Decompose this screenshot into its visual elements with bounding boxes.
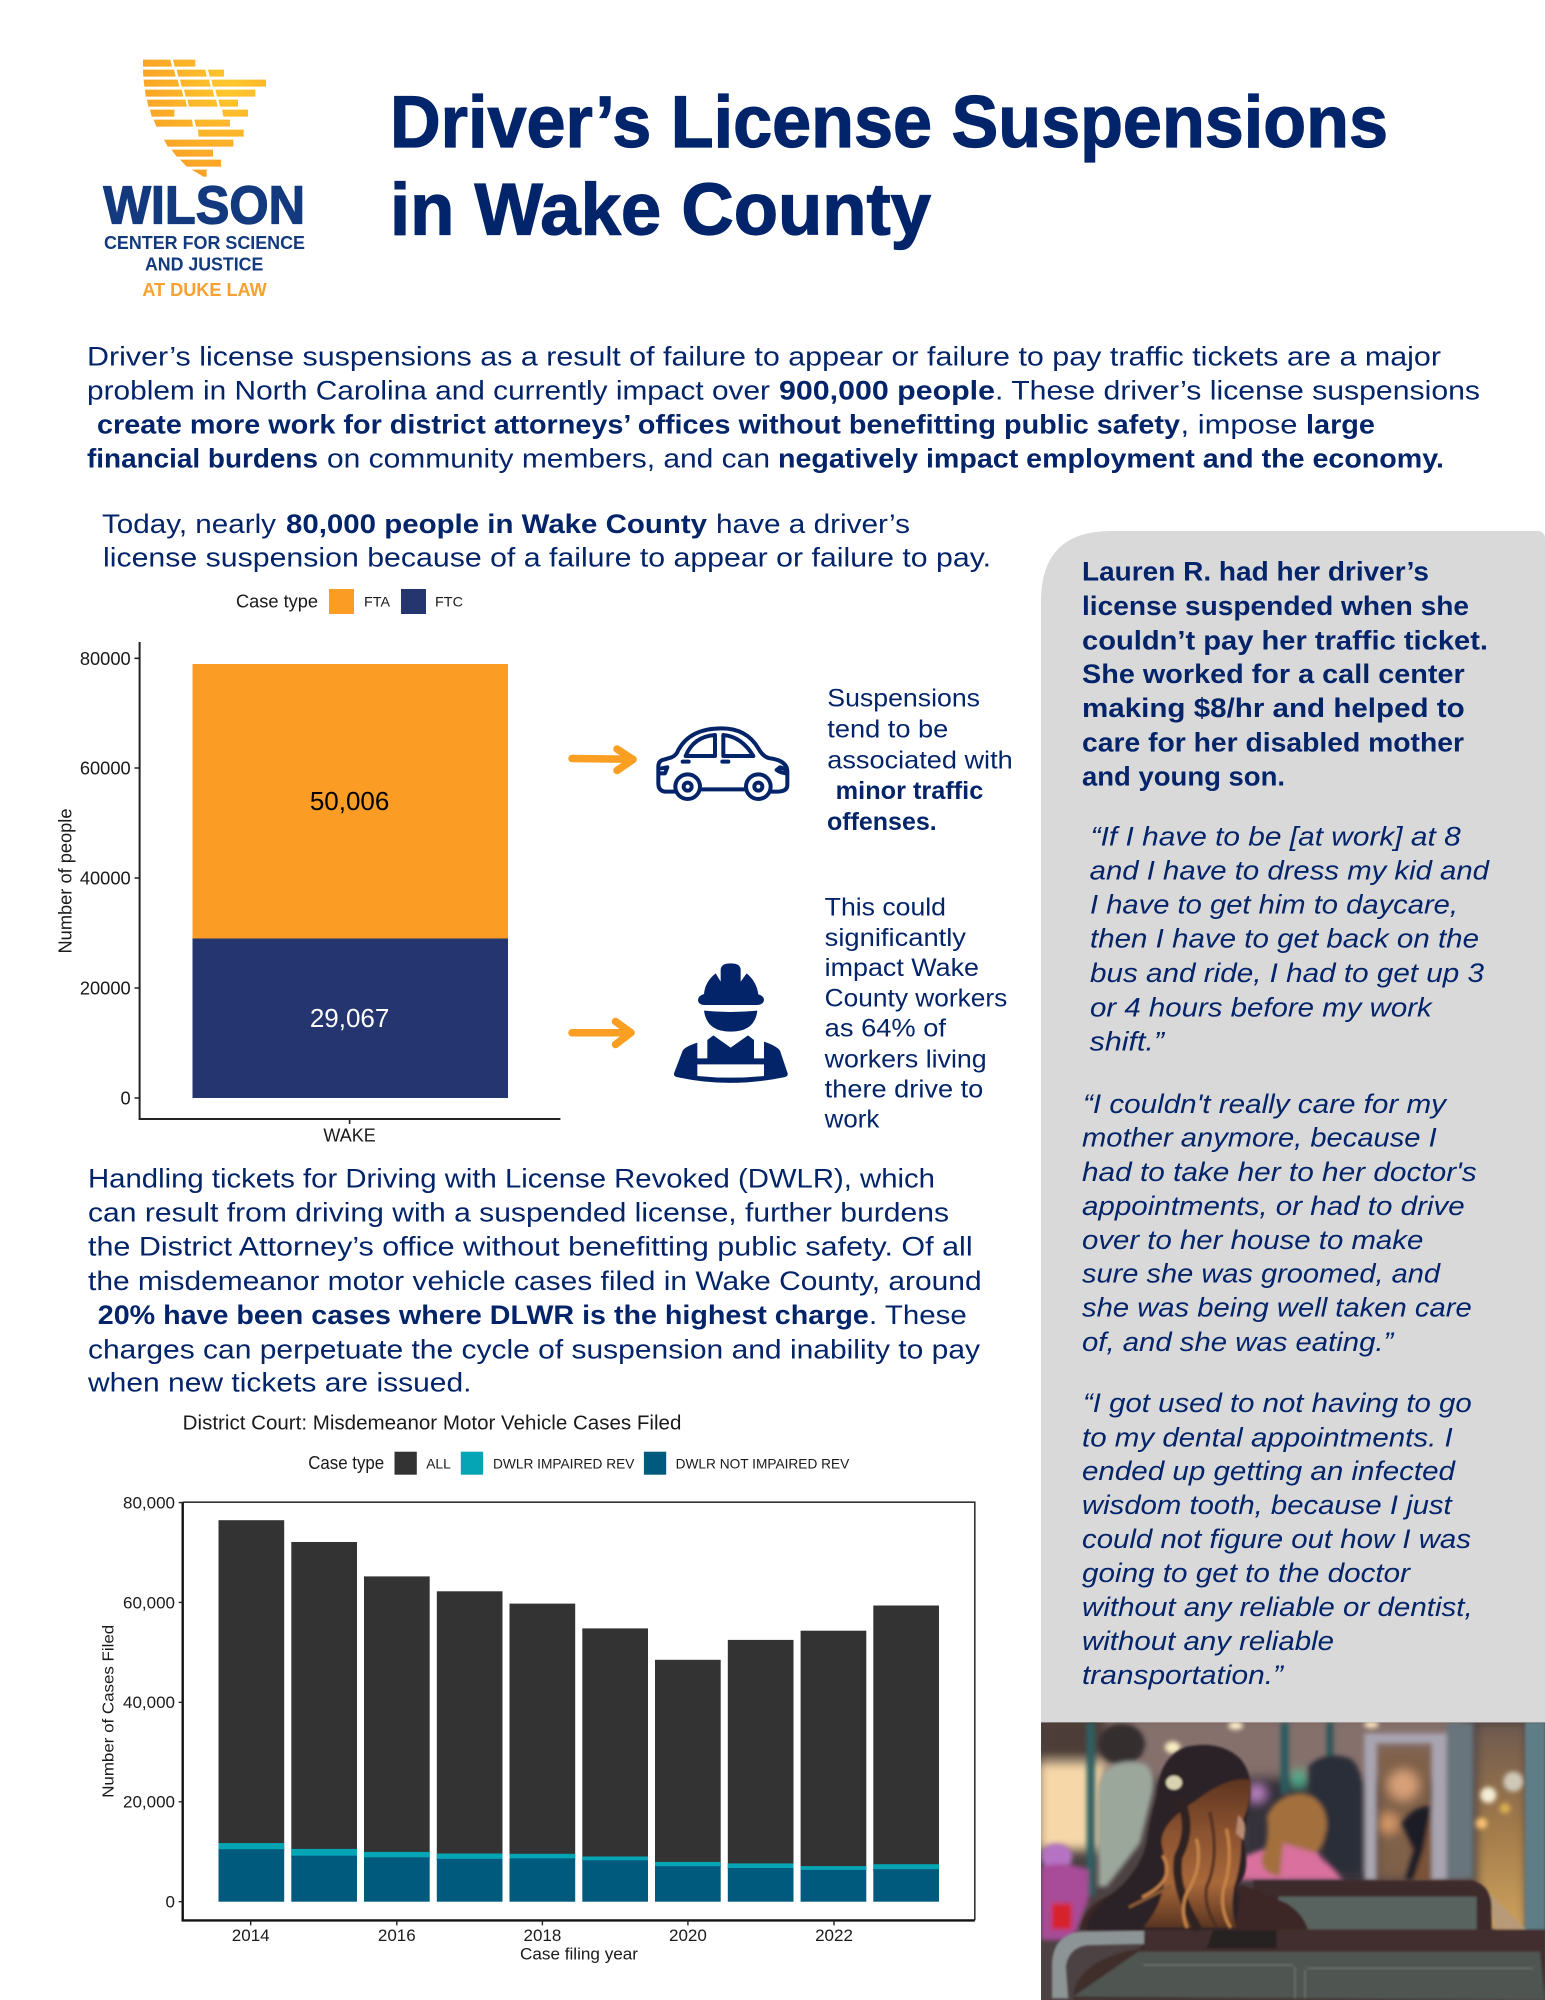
quote 1: bus and ride, I had to get up 3 — [1090, 958, 1484, 988]
bars: DWLR impaired revocation — [218, 1843, 939, 1870]
story heading: couldn’t pay her traffic ticket. — [1082, 625, 1488, 655]
quote 3: going to get to the doctor — [1082, 1558, 1411, 1588]
quote 3: without any reliable — [1082, 1626, 1334, 1656]
title — [390, 82, 1388, 251]
bars: DWLR not impaired revocation — [218, 1849, 939, 1902]
text: impact on Wake County workers: impact Wake — [825, 954, 979, 982]
DWLR paragraph: can result from driving with a suspended license, further burdens — [88, 1198, 949, 1228]
chart legend: ALL — [426, 1455, 451, 1471]
story heading: and young son. — [1082, 762, 1285, 792]
DWLR paragraph — [87, 1164, 982, 1398]
intro paragraph: problem in North Carolina and currently impact over — [87, 375, 770, 405]
text: impact on Wake County workers: work — [824, 1105, 880, 1133]
intro paragraph: Driver’s license suspensions as a result of failure to appear or failure to pay traffic tickets are a major — [87, 342, 1441, 372]
woman hair — [1087, 1745, 1251, 1929]
logo wordmark: AT DUKE LAW — [142, 279, 267, 300]
chart legend: Case type — [308, 1453, 384, 1473]
quote 2: over to her house to make — [1082, 1225, 1423, 1255]
quote 1: “If I have to be [at work] at 8 — [1091, 822, 1461, 852]
quote 1: or 4 hours before my work — [1090, 992, 1433, 1022]
quote 2: “I couldn't really care for my — [1083, 1089, 1448, 1119]
quote 3: without any reliable or dentist, — [1082, 1592, 1473, 1622]
chart legend: DWLR IMPAIRED REV — [493, 1455, 635, 1471]
title: in Wake County — [390, 170, 931, 251]
chart axes: 20000 — [80, 978, 131, 998]
quote 2: mother anymore, because I — [1082, 1123, 1437, 1153]
bar: FTC — [192, 938, 508, 1098]
intro paragraph — [87, 342, 1480, 473]
chart title: District Court: Misdemeanor Motor Vehicle Cases Filed — [183, 1412, 681, 1434]
chart axes — [100, 1494, 975, 1963]
chart legend: FTA — [364, 594, 391, 610]
DWLR paragraph: when new tickets are issued. — [87, 1368, 472, 1398]
chart axes: 2022 — [815, 1926, 853, 1945]
text: minor traffic offenses: Suspensions — [827, 685, 980, 713]
text: impact on Wake County workers: there drive to — [825, 1075, 983, 1103]
bar: FTC: 29,067 — [310, 1003, 389, 1033]
icon: construction worker — [674, 963, 788, 1083]
chart axes: 40,000 — [123, 1693, 175, 1712]
intro paragraph: , impose — [1180, 409, 1298, 439]
quote 3: could not figure out how I was — [1082, 1524, 1471, 1554]
icon: car — [658, 728, 787, 799]
text: minor traffic offenses: offenses. — [827, 808, 937, 836]
text: minor traffic offenses: associated with — [827, 746, 1013, 774]
logo: Wilson Center for Science and Justice — [103, 60, 305, 300]
DWLR paragraph: the misdemeanor motor vehicle cases filed in Wake County, around — [88, 1266, 982, 1296]
chart axes: 60,000 — [123, 1593, 175, 1612]
chart axes: 0 — [121, 1088, 131, 1108]
chart axes: 2018 — [523, 1926, 561, 1945]
chart legend: FTC — [435, 594, 463, 610]
chart axes: Number of people — [56, 808, 76, 954]
story heading: license suspended when she — [1082, 591, 1469, 621]
chart axes: 2016 — [378, 1926, 416, 1945]
quote 3: to my dental appointments. I — [1082, 1422, 1453, 1452]
stacked bar chart: suspensions by case type — [56, 589, 560, 1145]
logo wordmark: WILSON — [103, 175, 305, 235]
chart axes: Case filing year — [520, 1944, 638, 1963]
chart axes: Number of Cases Filed — [100, 1625, 118, 1798]
chart axes: WAKE — [323, 1125, 376, 1145]
DWLR paragraph: the District Attorney’s office without benefitting public safety. Of all — [88, 1232, 973, 1262]
intro paragraph: 900,000 people — [779, 375, 995, 405]
DWLR paragraph: charges can perpetuate the cycle of suspension and inability to pay — [88, 1334, 981, 1364]
title: Driver’s License Suspensions — [390, 82, 1388, 163]
text: impact on Wake County workers: as 64% of — [825, 1015, 946, 1043]
chart axes: 40000 — [80, 868, 131, 888]
bar: FTA: 50,006 — [310, 786, 389, 816]
Wake County statement: have a driver’s — [716, 509, 910, 539]
DWLR paragraph: 20% have been cases where DLWR is the highest charge — [98, 1300, 869, 1330]
quote 3: wisdom tooth, because I just — [1082, 1490, 1453, 1520]
quote 2: had to take her to her doctor's — [1082, 1157, 1477, 1187]
text: impact on Wake County workers: This could — [825, 893, 946, 921]
chart legend: DWLR NOT IMPAIRED REV — [676, 1455, 850, 1471]
chart axes: 0 — [166, 1893, 175, 1912]
text: impact on Wake County workers — [824, 893, 1007, 1133]
DWLR paragraph: . These — [869, 1300, 967, 1330]
Wake County statement: 80,000 people in Wake County — [286, 509, 707, 539]
intro paragraph: negatively impact employment and the economy. — [778, 443, 1444, 473]
story heading: Lauren R. had her driver’s — [1082, 557, 1429, 587]
intro paragraph: large — [1306, 409, 1375, 439]
arrow: to car — [572, 749, 633, 770]
DWLR paragraph: Handling tickets for Driving with License Revoked (DWLR), which — [88, 1164, 935, 1194]
quote 3: transportation.” — [1082, 1660, 1284, 1690]
Wake County statement — [102, 509, 991, 573]
Wake County statement: license suspension because of a failure to appear or failure to pay. — [103, 543, 991, 573]
bar chart: misdemeanor motor vehicle cases filed — [100, 1412, 975, 1963]
Wake County statement: Today, nearly — [102, 509, 277, 539]
quote 3: “I got used to not having to go — [1083, 1388, 1472, 1418]
logo wordmark — [103, 175, 305, 300]
quote 1: then I have to get back on the — [1090, 924, 1479, 954]
seat backs — [1052, 1722, 1545, 2000]
chart legend — [308, 1452, 850, 1475]
quote 2: of, and she was eating.” — [1082, 1327, 1394, 1357]
chart legend — [236, 589, 463, 614]
story heading: care for her disabled mother — [1082, 727, 1465, 757]
bar: FTA — [192, 664, 508, 938]
logo wordmark: AND JUSTICE — [145, 254, 263, 275]
chart axes — [56, 642, 560, 1145]
chart axes: 2014 — [232, 1926, 270, 1945]
intro paragraph: financial burdens — [87, 443, 318, 473]
chart axes: 80000 — [80, 648, 131, 669]
text: minor traffic offenses — [827, 685, 1013, 836]
quote 3: ended up getting an infected — [1082, 1456, 1456, 1486]
quote 1 — [1090, 822, 1490, 1056]
story heading: making $8/hr and helped to — [1082, 693, 1465, 723]
text: minor traffic offenses: tend to be — [827, 716, 948, 744]
chart axes: 20,000 — [123, 1793, 175, 1812]
story heading: She worked for a call center — [1082, 659, 1465, 689]
chart axes: 60000 — [80, 758, 131, 778]
text: impact on Wake County workers: County workers — [825, 985, 1007, 1013]
intro paragraph: on community members, and can — [327, 443, 770, 473]
panel: Lauren R. story — [1041, 531, 1545, 1725]
quote 3 — [1082, 1388, 1473, 1690]
arrow: to worker — [572, 1022, 631, 1044]
text: impact on Wake County workers: workers living — [824, 1045, 987, 1073]
logo mark: striped shield — [143, 60, 266, 177]
intro paragraph: create more work for district attorneys’ offices without benefitting public safety — [97, 409, 1180, 439]
text: impact on Wake County workers: significantly — [825, 924, 967, 952]
quote 2: she was being well taken care — [1082, 1292, 1472, 1322]
chart axes: 2020 — [669, 1926, 707, 1945]
intro paragraph: . These driver’s license suspensions — [995, 375, 1480, 405]
photo: woman riding a bus — [1038, 1717, 1545, 2000]
chart legend: Case type — [236, 592, 318, 612]
quote 2: sure she was groomed, and — [1082, 1259, 1441, 1289]
logo wordmark: CENTER FOR SCIENCE — [104, 232, 305, 253]
quote 1: and I have to dress my kid and — [1090, 855, 1490, 885]
chart axes: 80,000 — [123, 1494, 175, 1512]
quote 2: appointments, or had to drive — [1082, 1191, 1465, 1221]
story heading — [1082, 557, 1488, 792]
text: minor traffic offenses: minor traffic — [836, 777, 983, 805]
bars: all cases — [218, 1520, 939, 1871]
quote 2 — [1082, 1089, 1477, 1357]
quote 1: I have to get him to daycare, — [1090, 890, 1458, 920]
quote 1: shift.” — [1090, 1026, 1165, 1056]
